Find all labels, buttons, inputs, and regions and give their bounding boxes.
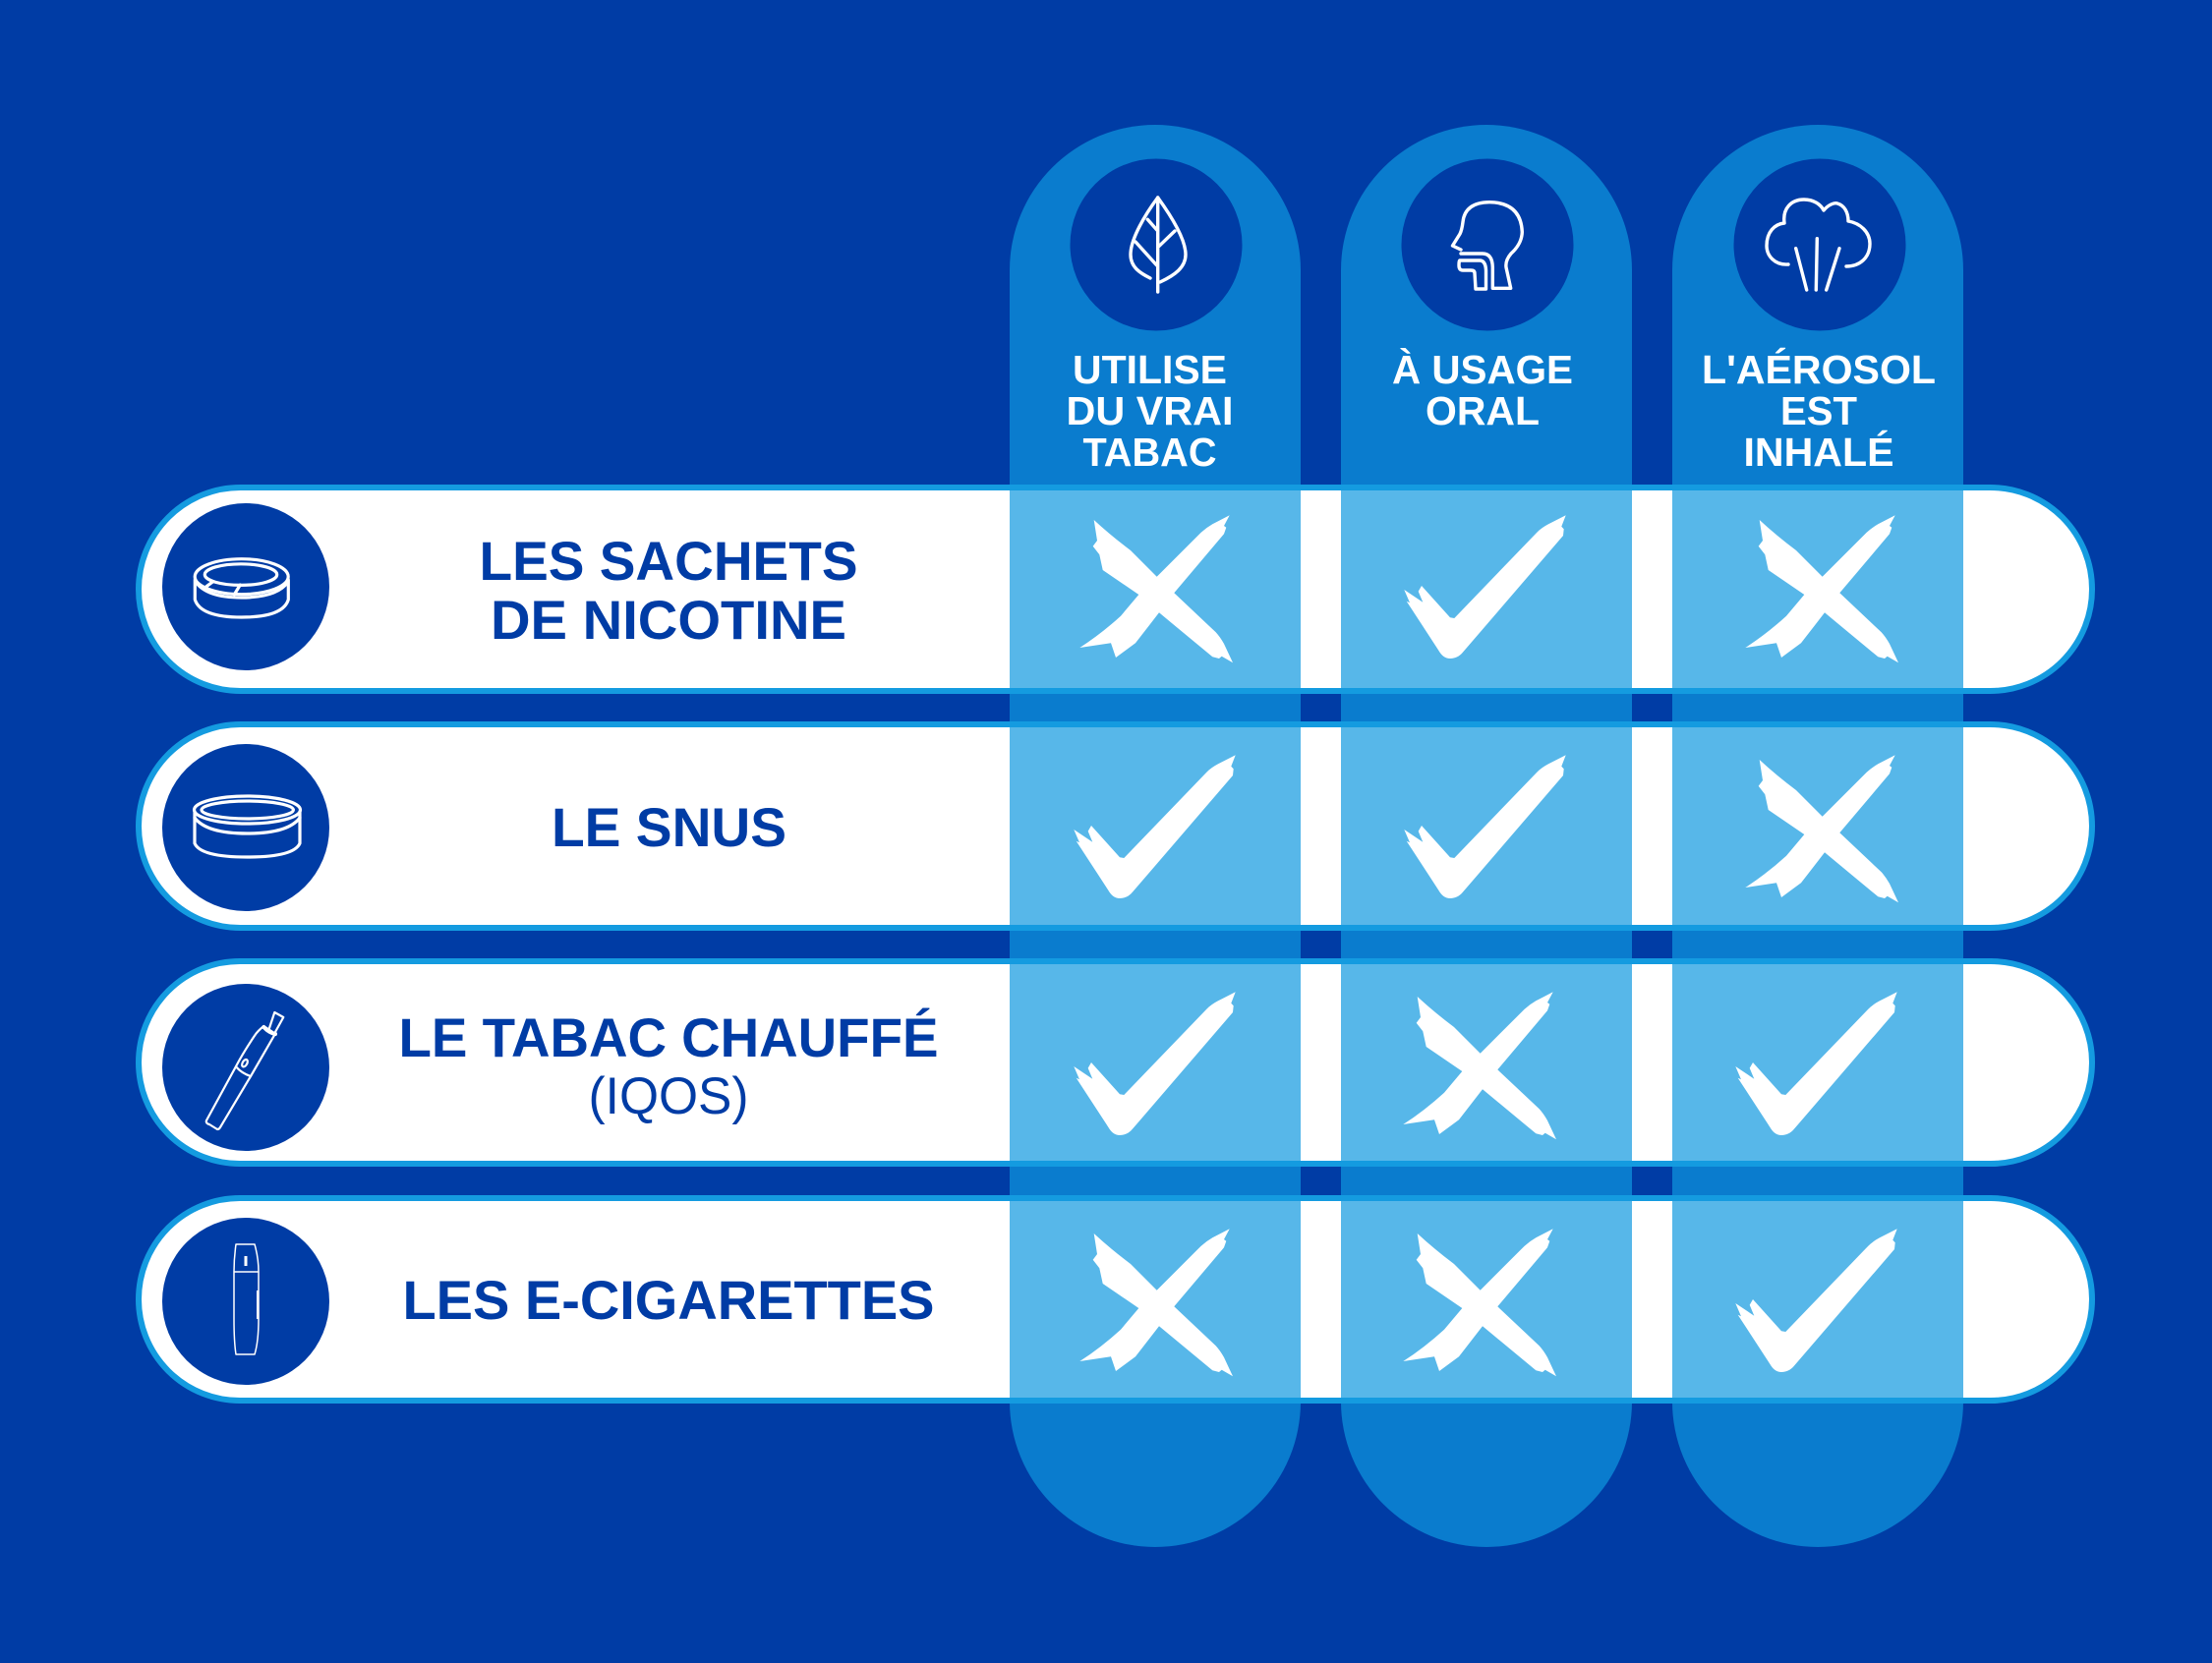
heading: l'aérosol est inhalé [1702,347,1936,475]
label: les e-cigarettes: LES E-CIGARETTES [403,1269,934,1331]
row: les sachets de nicotine [139,487,2092,691]
icon: heated tobacco device [162,984,329,1151]
mark: e-cigarettes, aérosol, yes [1735,1229,1897,1372]
heading: l'aérosol est inhalé: L'AÉROSOL [1702,347,1936,392]
heading: utilise du vrai tabac: DU VRAI [1066,388,1233,433]
label: les sachets de nicotine: LES SACHETS [480,530,857,592]
heading: à usage oral [1392,347,1573,433]
label: les sachets de nicotine: DE NICOTINE [491,589,846,651]
heading: à usage oral: ORAL [1426,388,1540,433]
icon: leaf [1070,159,1243,330]
label: le tabac chauffé (iqos): LE TABAC CHAUFFÉ [399,1006,938,1068]
icon: cloud of vapour [1734,159,1905,330]
heading: utilise du vrai tabac: UTILISE [1073,347,1227,392]
mark: sachets, aérosol, no [1745,515,1898,662]
icon: snus tin [162,744,329,911]
mark: snus, usage oral, yes [1404,755,1566,898]
label: le tabac chauffé (iqos): (IQOS) [588,1067,749,1125]
mark: e-cigarettes, vrai tabac, no [1079,1229,1233,1376]
icon: head and throat [1402,159,1573,330]
column overlays on rows [1010,490,1963,1398]
row: le tabac chauffé [139,961,2092,1164]
column: utilise du vrai tabac [1010,125,1301,1547]
mark: sachets, usage oral, yes [1404,515,1566,659]
mark: snus, vrai tabac, yes [1074,755,1236,898]
mark: snus, aérosol, no [1745,755,1898,902]
mark: tabac chauffé, usage oral, no [1403,992,1556,1139]
label: les sachets de nicotine [480,530,857,651]
heading: l'aérosol est inhalé: INHALÉ [1744,430,1893,475]
row: le snus [139,724,2092,928]
heading: utilise du vrai tabac: TABAC [1083,430,1217,475]
column: à usage oral [1341,125,1632,1547]
mark: tabac chauffé, vrai tabac, yes [1074,992,1236,1135]
heading: utilise du vrai tabac [1066,347,1233,475]
heading: à usage oral: À USAGE [1392,347,1573,392]
label: le tabac chauffé (iqos) [399,1006,938,1125]
heading: l'aérosol est inhalé: EST [1780,388,1857,433]
mark: tabac chauffé, aérosol, yes [1735,992,1897,1135]
mark: e-cigarettes, usage oral, no [1403,1229,1556,1376]
column: l'aérosol est inhalé [1672,125,1963,1547]
row: les e-cigarettes [139,1198,2092,1401]
icon: e-cigarette [162,1218,329,1385]
mark: sachets, vrai tabac, no [1079,515,1233,662]
label: le snus: LE SNUS [552,796,786,858]
icon: nicotine pouch tin [162,503,329,670]
